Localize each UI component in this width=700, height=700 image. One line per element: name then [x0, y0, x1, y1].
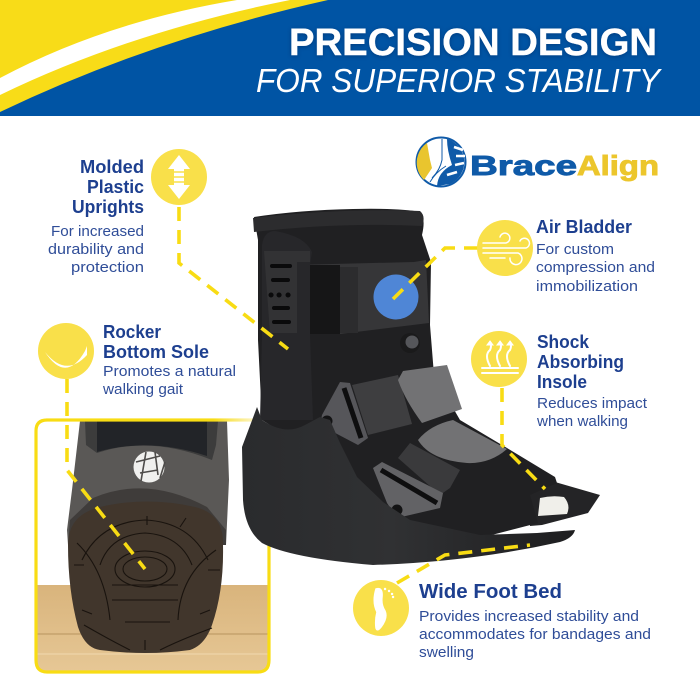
heading: Bottom Sole: [103, 342, 209, 362]
heading: Absorbing: [537, 352, 624, 372]
heading: Plastic: [87, 177, 144, 197]
description: when walking: [536, 414, 628, 430]
heading: Shock: [537, 332, 590, 352]
lower buckle and strap: [373, 420, 507, 518]
title: [256, 22, 662, 99]
description: Promotes a natural: [103, 364, 236, 380]
logo: BraceAlign: [416, 138, 659, 186]
description: [102, 364, 236, 398]
heading: [72, 157, 144, 217]
boot cuff: [253, 210, 424, 232]
description: compression and: [536, 260, 655, 276]
inset frame: [36, 418, 269, 672]
title: FOR SUPERIOR STABILITY: [256, 62, 662, 99]
inset photo: rocker sole: [37, 421, 268, 671]
description: swelling: [419, 645, 474, 661]
ankle strap: [293, 260, 429, 334]
sole tread grooves: [74, 516, 220, 650]
icon: wind: [477, 220, 533, 276]
callout: air bladder: [393, 217, 655, 299]
heading: Uprights: [72, 197, 144, 217]
upright: [260, 231, 313, 420]
description: [536, 396, 647, 430]
logo: BraceAlign: Brace: [470, 150, 577, 181]
description: [48, 224, 144, 276]
description: durability and: [48, 242, 144, 258]
boot photo: [242, 209, 600, 565]
heading: [103, 322, 209, 362]
description: For increased: [51, 224, 144, 240]
boot shell: [242, 407, 575, 565]
heading: Molded: [80, 157, 144, 177]
release button: [400, 333, 420, 353]
globe emblem: [134, 452, 165, 482]
title: PRECISION DESIGN: [289, 22, 657, 64]
description: For custom: [536, 242, 614, 258]
icon: vertical arrows: [151, 149, 207, 205]
description: protection: [71, 260, 144, 276]
boot toe sole flap: [528, 482, 600, 526]
callout: molded plastic uprights: [48, 149, 288, 349]
heading: [537, 332, 624, 392]
callout: shock absorbing insole: [471, 331, 647, 489]
description: Reduces impact: [537, 396, 647, 412]
heading: Rocker: [103, 322, 161, 342]
logo: BraceAlign: Align: [577, 150, 659, 181]
heading: Wide Foot Bed: [419, 581, 562, 603]
upper buckle and strap: [320, 365, 462, 445]
icon: footprint: [353, 580, 409, 636]
description: Provides increased stability and: [419, 609, 639, 625]
description: immobilization: [536, 279, 638, 295]
callout: wide foot bed: [353, 545, 651, 661]
description: [419, 609, 651, 661]
heading: Air Bladder: [536, 217, 632, 237]
blue air valve: [374, 274, 418, 320]
boot leg and foot fabric: [254, 209, 557, 538]
icon: curved arrow: [38, 323, 94, 379]
heading: Insole: [537, 372, 587, 392]
description: [536, 242, 655, 295]
header banner: [0, 0, 700, 116]
description: accommodates for bandages and: [419, 627, 651, 643]
description: walking gait: [102, 382, 183, 398]
icon: rising arrows: [471, 331, 527, 387]
boot toe: [538, 496, 568, 516]
callout: rocker bottom sole: [38, 322, 236, 569]
